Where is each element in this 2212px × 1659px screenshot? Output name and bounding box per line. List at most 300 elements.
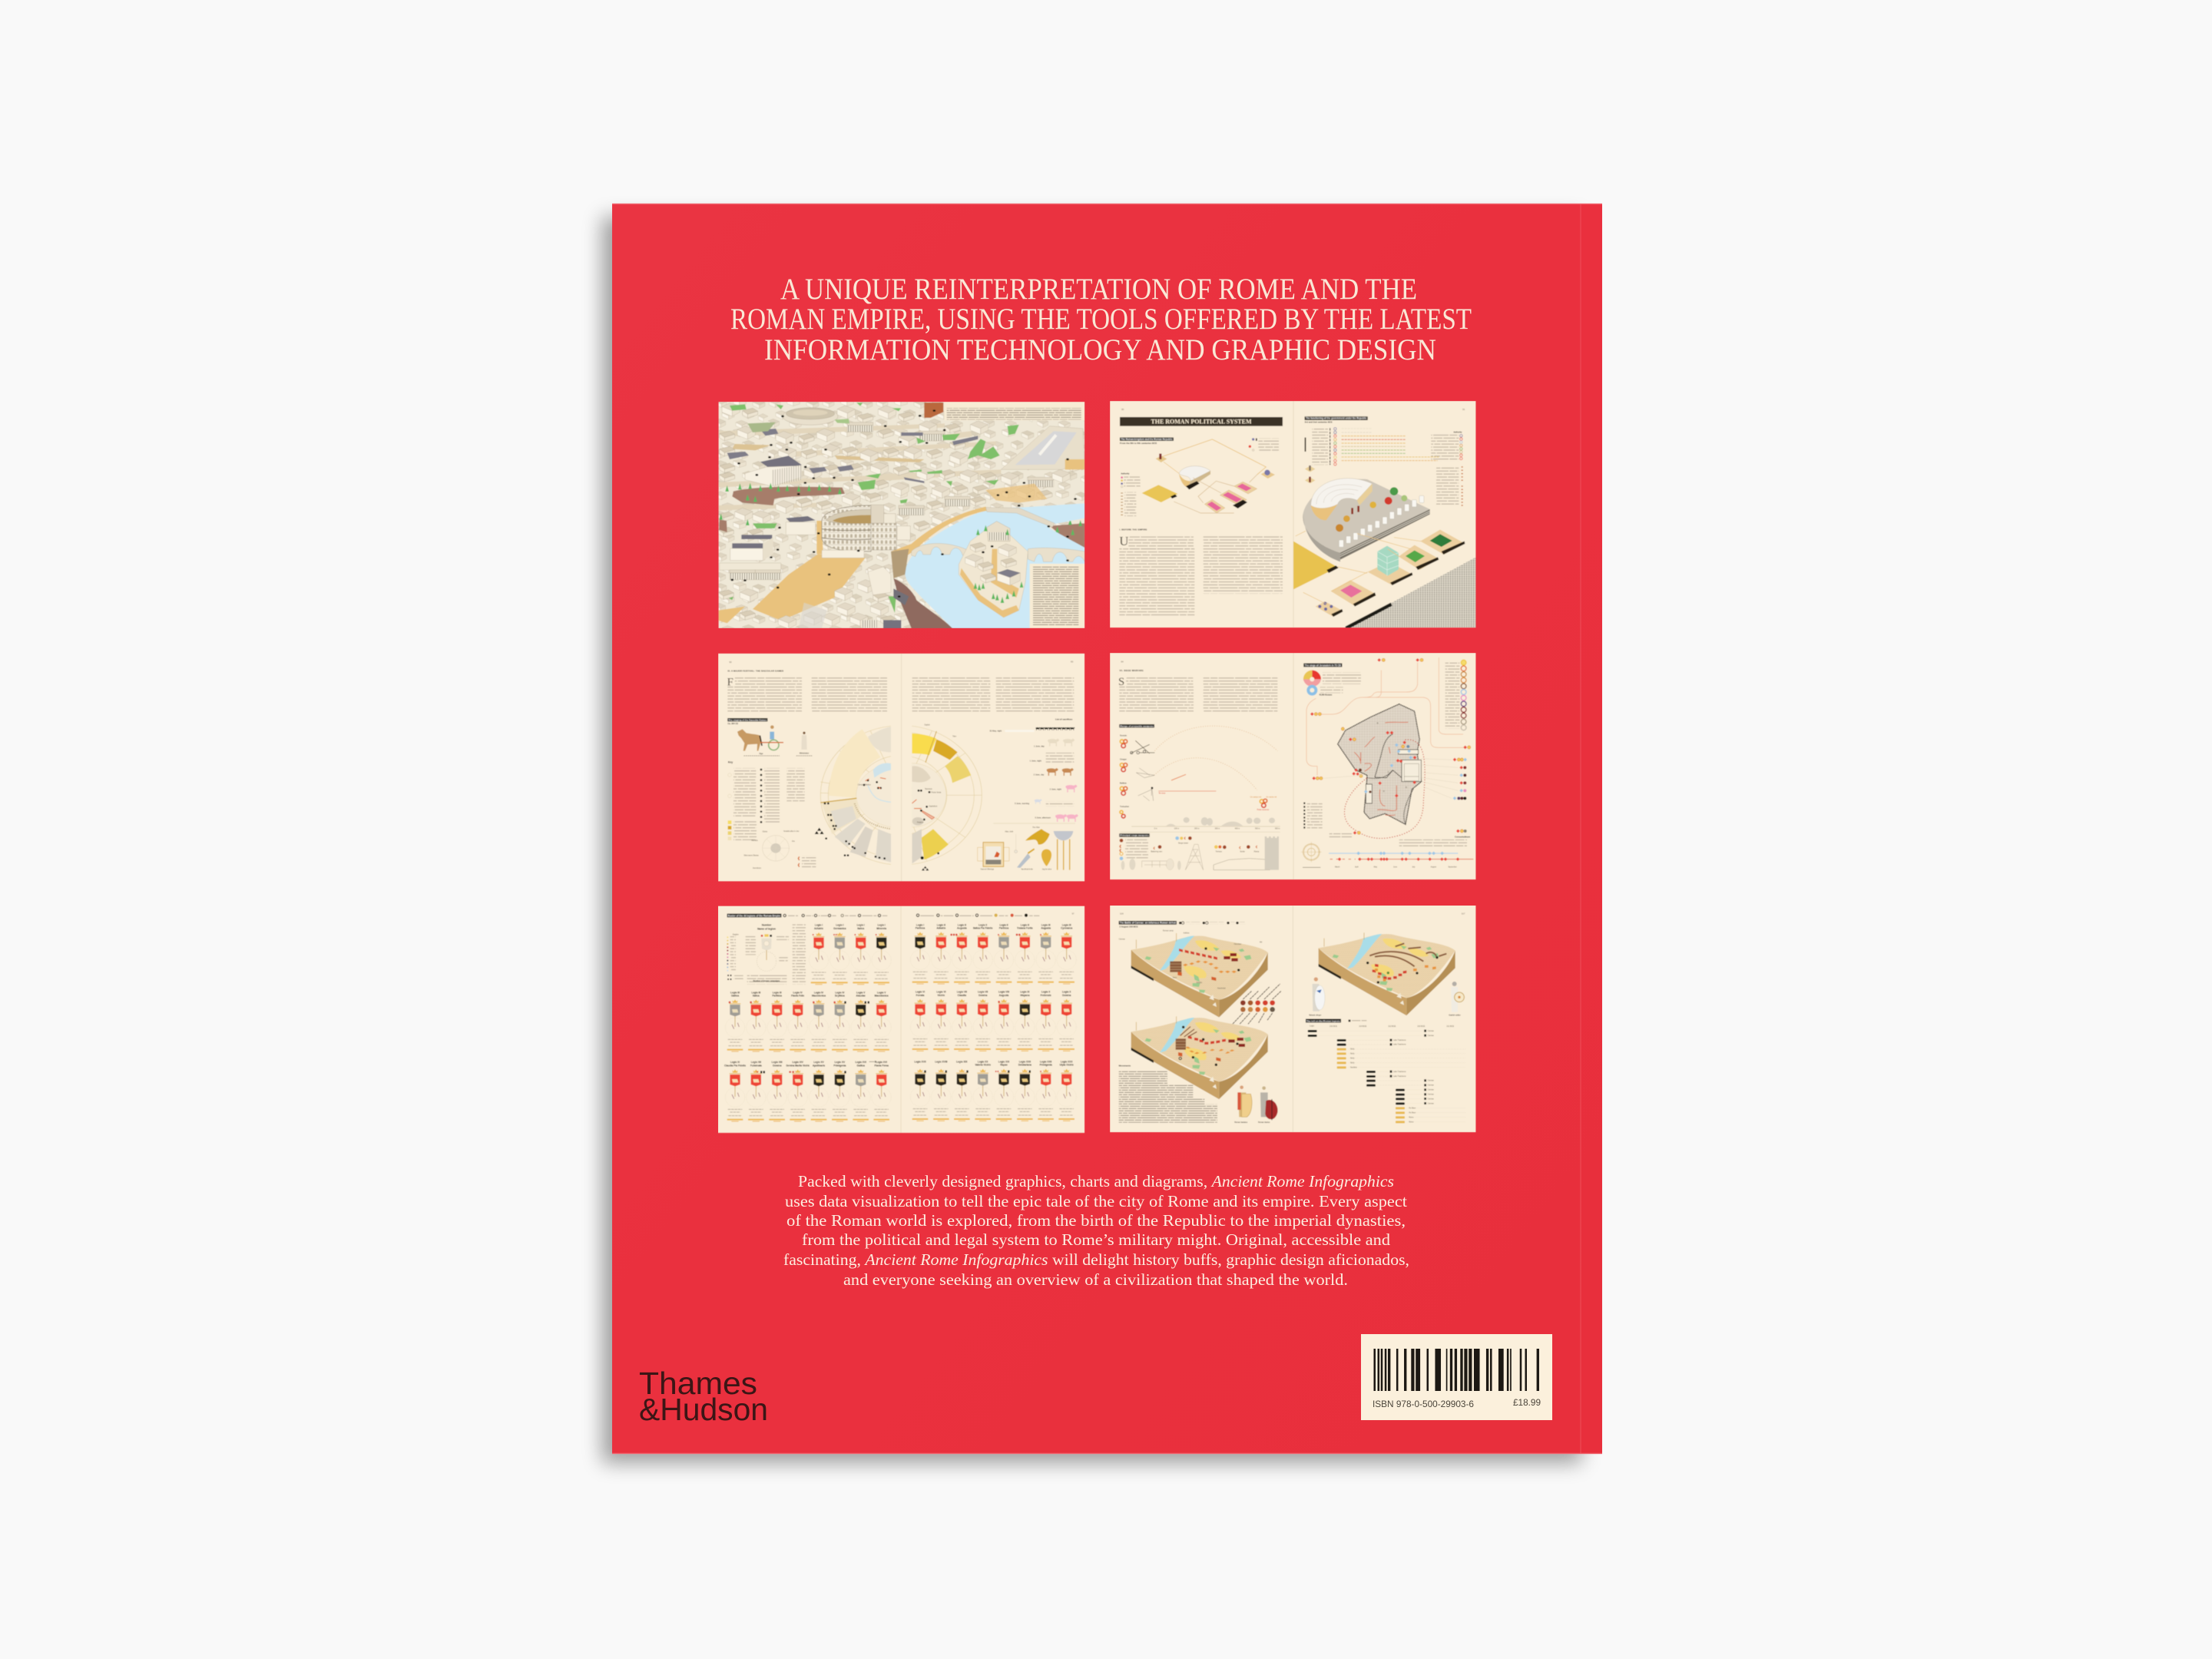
legion names: Legio XIX [956,1060,968,1063]
chart: projectile ranges: Un campo mir [1250,796,1261,799]
chart: legion tribunes timeline: Cannae [1428,1098,1435,1100]
legion names: Ferrata [916,994,925,997]
section heading: III. A MAJOR FESTIVAL: THE SAECULAR GAMES [727,669,783,672]
legion names: Legio III [773,991,782,994]
upper bridge [985,508,1055,527]
terrain block 1: Aufidus [1184,932,1190,935]
subheading: kingdom and republic: The Roman kingdom and the Roman Republic [1121,438,1173,441]
legend: authority right [1431,431,1463,506]
comitia squares [1296,530,1465,617]
terrain block 1: Hill [1260,942,1263,944]
illustration: Roman forum platform [1303,478,1430,561]
legion names: Legio XXX [1061,1060,1073,1063]
list of sacrifices: 2 June, night [1050,787,1061,790]
legion names: Scythica [835,995,845,998]
title bar [1120,417,1283,426]
barcode label: £18.99 [1513,1397,1541,1408]
panel: axonometric map of Rome spread [718,402,1084,629]
chart: projectile ranges: 600 m [1275,828,1280,830]
chart: projectile ranges: 300 m [1215,828,1220,830]
compass rose [1301,842,1322,867]
legend: authority right: Authority [1453,431,1462,433]
chart: legion tribunes timeline: Cannae [1428,1094,1435,1096]
timeline of the siege: March [1335,866,1340,868]
header legend [783,914,1039,917]
body text column 1: U [1119,534,1128,548]
subheading: government under the Republic: 3rd and 2nd centuries BCE [1305,420,1333,423]
arrow between legions [869,1061,876,1063]
ritual objects [978,826,1073,871]
legion names: Rapax [1000,1064,1008,1067]
brown slope with trees [719,483,1084,548]
chart: projectile ranges: 0 m [1154,828,1157,830]
timeline of the siege: September [1448,866,1457,868]
legion names: Primigenia [833,1065,846,1068]
legion names: Italica [753,995,760,998]
legion names: Legio XVIII [935,1060,948,1063]
buildings [718,403,1083,538]
body copy: fascinating, Ancient Rome Infographics will delight history buffs, graphic design aficionados, [783,1250,1409,1269]
attack groups around the map [1310,658,1471,835]
hatched tree wedge [868,727,891,752]
list of sacrifices: 3 June, afternoon [1035,816,1051,819]
headline [730,273,1472,366]
chart: legion tribunes timeline: Rome [1409,1117,1414,1118]
legend: authority and people [1121,472,1141,516]
legion names: Minervia [876,927,886,930]
illustration: siege towers and ramps: Sortie [1240,850,1245,853]
legion names: Legio VI [936,991,946,994]
legion names: Legio VIII [998,991,1009,994]
aftermath note [1330,833,1471,848]
legion standards: row 1 [809,932,1076,985]
legion names: Valeria Victrix [975,1064,991,1067]
page numbers [1121,408,1465,411]
chart: projectile ranges: 200 m [1194,828,1200,830]
legend: siege weapons icons [1445,660,1466,730]
chart: projectile ranges: Onager [1120,758,1127,761]
title bar: THE ROMAN POLITICAL SYSTEM [1151,419,1252,426]
timeline of the siege: July [1412,866,1416,868]
body copy: and everyone seeking an overview of a civilization that shaped the world. [843,1270,1348,1289]
greenery patches [726,402,1019,613]
chart: legion tribunes timeline: Cannae [1428,1090,1435,1091]
subheading: government under the Republic: The functioning of the government under the Republic [1306,417,1367,420]
inner city disc [878,763,946,827]
figures: Numidian and Gaulish warrior: Balearic slinger [1309,1014,1322,1016]
figures: Roman legionary and veteran: Roman hastatus [1234,1121,1248,1124]
legend: key [728,760,805,840]
chart: magistracies timeline [1305,428,1439,465]
small plan of Rome: Silva sacra Dianae [743,855,759,857]
legion names: Legio XVI [876,1061,887,1064]
legion names: Legio III [1041,923,1051,926]
timeline of the siege [1329,852,1473,868]
aftermath note: Consuetudinem [1455,835,1471,838]
coloured offering wedges [912,733,936,755]
chart: legion tribunes timeline: Cannae [1428,1031,1435,1032]
legion names: Cyrenaica [1061,927,1072,930]
headline: ROMAN EMPIRE, USING THE TOOLS OFFERED BY THE LATEST [730,303,1472,336]
chart: legion tribunes timeline: Sicily [1350,1058,1355,1059]
legion names: Ulpia Victrix [1060,1064,1074,1067]
chart: legion tribunes timeline: Rome [1409,1121,1414,1123]
location markers [730,409,1077,598]
theatre of Marcellus [822,505,910,558]
diagram: early Roman institutions [1142,439,1275,513]
chart: legion tribunes timeline: Sicily [1350,1062,1355,1064]
legion names: Gemina [1062,994,1071,997]
body text columns: S [1118,676,1124,688]
chart: projectile ranges: 500 m [1255,828,1260,830]
chart: legion tribunes timeline: Lake Trasimene [1393,1071,1406,1073]
radial diagram left half: Campus Martius [858,784,871,786]
circus [1001,426,1084,469]
header title: Roster of the 44 legions of the Roman Empire [728,914,781,917]
legion names: Gallica [731,995,739,998]
legion names: Legio II [979,923,987,926]
legion names: Augusta [957,927,967,930]
terrain block 2 [1131,1016,1268,1099]
terrain block 1: Roman camp [1163,931,1174,932]
legion names: Legio III [751,991,760,994]
legion names: Adiutrix [814,927,823,930]
legion names: Legio IV [814,991,824,994]
legion names: Parthica [772,995,782,998]
legion names: Legio VI [916,991,925,994]
streets and terraces [718,423,1001,511]
bridge right [1028,548,1084,561]
legion names: Italica [857,927,864,930]
legion names: Legio II [937,923,945,926]
subheading: kingdom and republic [1120,438,1174,445]
radial diagram right half: Capitol [924,724,930,727]
legion names: Macedonica [875,995,889,998]
small plan of Rome [743,830,816,869]
legion names: Legio XV [835,1061,846,1064]
legion names: Victrix [938,994,945,997]
legion names: Legio XVI [855,1061,866,1064]
legion names: Flavia Felix [791,995,804,998]
legion names: Legio III [1062,923,1071,926]
page numbers [729,661,1074,664]
panel: Battle of Cannae spread [1110,905,1476,1132]
legion names: Claudia [958,994,966,997]
legion names: Parthica [999,927,1008,930]
panel: Siege Warfare spread [1110,653,1476,879]
body copy: Packed with cleverly designed graphics, charts and diagrams, Ancient Rome Infographics [798,1172,1394,1190]
legion names: Gemina Martia Victrix [786,1065,810,1068]
subheading: staging of the games [727,718,767,725]
legion names: Legio VII [978,991,988,994]
body copy: uses data visualization to tell the epic tale of the city of Rome and its empire. Every aspect [785,1192,1407,1210]
subheading: projectile weapons: Range of projectile weapons [1120,724,1154,727]
map of Jerusalem: F [1406,803,1408,806]
radial diagram left half [815,726,982,865]
yellow comitia triangle [1293,541,1339,589]
legion names: Gemina [773,1065,782,1068]
body text column 2 [1204,535,1283,594]
chart: legion tribunes timeline: Lake Trasimene [1393,1044,1406,1046]
small senate tokens [1305,465,1315,483]
legion names: Legio XV [813,1061,825,1064]
small plan of Rome: Mundus [751,840,758,842]
key: how to read a legion: Name of legion [757,927,776,930]
pie charts [1303,671,1361,696]
radial diagram right half: Tarentum [925,788,932,790]
body copy: from the political and legal system to Rome’s military might. Original, accessible and [802,1230,1390,1249]
timeline of the siege: June [1393,866,1398,868]
legion names: Legio V [877,991,886,994]
radial diagram right half: Tiber [952,735,956,737]
foreground buildings [718,565,901,629]
river Tiber [905,503,1084,628]
body text columns [727,677,1074,712]
map of Jerusalem: D [1383,790,1386,793]
key: how to read a legion: Number of known campaigns [753,980,780,982]
legion names: Traiana Fortis [1017,927,1033,930]
attack markers on the map [1341,727,1416,797]
caption box bottom right [1030,564,1084,628]
brick patch [924,402,943,418]
caption box top right [944,402,1084,420]
legion names: Legio XX [978,1060,988,1063]
terrain block 1: Hasdrubal [1217,987,1226,989]
text: movements: Movements [1119,1064,1131,1067]
chart: legion tribunes timeline: Cannae [1428,1103,1435,1104]
small plan of Rome: Gloria [763,831,768,833]
legion names [724,923,1074,1068]
bridge left [912,544,966,557]
legion names: Legio I [916,923,924,926]
text: movements [1119,1064,1217,1123]
terrain block 1: Varro [1173,976,1177,979]
title: 2 August 216 BCE [1119,925,1138,928]
chart: legion tribunes timeline: Po River [1409,1107,1416,1109]
senate hemicycle [1311,478,1373,508]
timeline of the siege: May [1374,866,1378,868]
page shadow under the book [602,217,1581,1463]
legion names: Alaudae [856,995,866,998]
legion names: Legio X [1062,991,1071,994]
map of Jerusalem [1338,704,1425,839]
subheading: siege weapons: Principal siege weapons [1120,834,1149,837]
list of sacrifices: 31 May, night [989,730,1002,733]
icon: standing priest [796,732,812,756]
figures: Roman legionary and veteran [1234,1085,1278,1124]
ritual objects: Sacrificial knife [1021,869,1034,871]
panel: roster of the legions spread [717,906,1084,1133]
chart: legion tribunes timeline: 212 BCE [1388,1025,1396,1028]
icon: standing priest: Ministrator [800,751,809,754]
barcode label [1361,1334,1552,1420]
legion names: Legio XI [730,1061,740,1064]
illustration: siege towers and ramps: Ramp [1254,850,1260,853]
legion names: Legio II [1021,923,1029,926]
icon: horse and chariot [737,725,783,756]
legion names: Flavia Firma [874,1065,889,1068]
legion names: Legio XIII [772,1061,783,1064]
terrain block 1: Cavalry [1196,982,1203,984]
page number: 94 [1121,661,1124,664]
chart: legion tribunes timeline: Sicily [1350,1049,1355,1051]
small plan of Rome: Vestalis alba in vivo [783,830,800,833]
illustration: siege towers and ramps: Siege tower [1178,842,1188,844]
legion names: Legio I [857,924,865,927]
section heading: I. BEFORE THE EMPIRE [1119,528,1147,531]
legion names: Legio II [958,923,966,926]
legion names: Legio II [999,923,1008,926]
pale wedge [829,729,881,798]
legion names: Adiutrix [936,927,946,930]
legion names: Legio III [730,991,740,994]
legion names: Legio I [815,924,823,927]
icon: horse and chariot: Ilige [760,752,763,755]
illustration: siege towers and ramps: Battering ram [1151,850,1162,853]
battle honours [729,934,1041,1073]
barcode label: ISBN 978-0-500-29903-6 [1373,1399,1474,1409]
chart: legion tribunes timeline: Cannae [1428,1035,1435,1037]
publisher logo: &Hudson [639,1392,768,1427]
legion names: Legio IV [793,991,803,994]
chart: legion tribunes timeline: Cannae [1428,1081,1435,1082]
subheading: toll on the legions [1306,1019,1366,1022]
legion names: Hispana [1020,994,1030,997]
legion names: Macedonica [812,995,826,998]
panel: roster of the legions spread: 97 [1072,912,1075,916]
page numbers: 116 [1120,912,1124,916]
map of Jerusalem: E [1406,786,1407,789]
page numbers: 117 [1462,912,1465,915]
legend: gates [1303,802,1323,829]
legend circles: units [1229,984,1281,1028]
headline: A UNIQUE REINTERPRETATION OF ROME AND THE [780,273,1417,306]
body text column 1 [1119,534,1194,616]
internal red routes [1354,722,1408,816]
page numbers [1120,912,1465,916]
legion names: Legio I [878,924,886,927]
illustration: siege towers and ramps [1120,836,1279,870]
figures: Roman legionary and veteran: Roman triarius [1258,1121,1270,1124]
title [1119,921,1177,928]
figures: Numidian and Gaulish warrior [1309,977,1464,1016]
key: colour scale: Eagles [733,934,739,936]
chart: legion tribunes timeline: Lake Trasimene [1393,1039,1406,1041]
legend: authority and people: Authority [1121,472,1130,475]
colonnade [1339,495,1424,547]
key: colour scale [727,924,806,985]
top arena [783,408,838,425]
chart: projectile ranges: Tiro teso [1158,792,1166,794]
radial diagram right half [820,724,982,870]
legion standards: row 3 [725,1069,1076,1121]
small key top right [1249,438,1279,451]
subheading: government under the Republic [1305,416,1368,423]
legion names: Apollinaris [813,1065,825,1068]
legion names: Primigenia [1040,1064,1052,1067]
chart: legion tribunes timeline: Legio [1310,1025,1315,1027]
chart: projectile ranges: Scorpio [1120,734,1128,737]
chart: legion tribunes timeline: Lake Trasimene [1393,1075,1406,1078]
body copy: of the Roman world is explored, from the birth of the Republic to the imperial dynasties, [786,1211,1406,1230]
markers [918,790,939,870]
outer siege wall [1344,740,1425,839]
list of sacrifices: 1 June, day [1034,745,1045,748]
grey-roofed temples [720,429,978,580]
chart: projectile ranges: Trebuchet [1120,805,1129,808]
legion names: Legio IV [835,991,845,994]
chart: projectile ranges: Un monte mir [1266,796,1277,799]
terrain block 1: Hannibal [1234,944,1241,945]
chart: projectile ranges: Ballista [1120,781,1127,784]
legion names: Gallica [856,1065,865,1068]
radial diagram right half: Capitolium [929,806,937,808]
barcode bars [1373,1349,1539,1391]
page numbers: 30 [1121,408,1124,411]
legend: key: Key [728,760,733,763]
page numbers: 93 [1071,661,1074,664]
legion names: Legio X [1041,991,1051,994]
body copy [783,1172,1409,1289]
list of sacrifices: 2 June, day [1034,773,1045,777]
legion names: Legio XXII [1019,1060,1031,1063]
key: how to read a legion: Number [762,924,772,927]
list of sacrifices: 3 June, morning [1015,802,1030,805]
Tiber island [959,522,1028,618]
radial diagram right half: Palatine [917,822,924,824]
publisher logo: Thames [639,1366,757,1401]
chart: projectile ranges: Porta murorum [1257,809,1269,811]
legion names: Legio I [836,924,844,927]
pie charts: 76,000 Romans [1319,694,1333,696]
legion names: Legio VII [957,991,967,994]
subheading: staging of the games: The staging of the Saecular Games [728,718,767,721]
legion names: Legio XXI [998,1060,1009,1063]
title: The Battle of Cannae: an infamous Roman defeat [1120,922,1177,925]
ritual objects: Jug for wine [1042,869,1052,871]
ritual objects: Altar, cloth [1005,830,1014,833]
crowd of citizens [1346,557,1476,628]
chart: projectile ranges: 100 m [1174,828,1179,830]
list of sacrifices: 1 June, night [1030,759,1041,762]
legion names: Legio XVII [914,1060,926,1063]
radial diagram right half: Ponte Vesta [932,791,942,793]
legion names: Claudia Pia Fidelis [724,1065,746,1068]
ritual objects: Sacred Offerings [981,869,995,871]
terrain block 1: Cannae [1119,939,1126,941]
legion names: Fretensis [1041,994,1051,997]
terrain block 1 [1119,931,1268,1017]
ritual objects: Fire Altar [1032,826,1040,829]
chart: legion tribunes timeline: Po River [1409,1111,1416,1114]
chart: legion tribunes timeline: 211 BCE [1446,1025,1454,1028]
subheading: staging of the games: Ca. 204 CE [727,722,738,725]
illustration: siege towers and ramps: Terrace [1216,850,1223,853]
panel: The Roman Political System spread [1110,401,1476,628]
chart: projectile ranges: 400 m [1235,828,1240,830]
chart: legion tribunes timeline: 210 BCE [1417,1025,1426,1028]
chart: legion tribunes timeline: 214 BCE [1359,1025,1367,1028]
legion names: Augusta [1041,927,1051,930]
inner city disc [856,763,946,828]
panel: Saecular Games spread [718,654,1084,882]
legion names: Legio XII [751,1061,761,1064]
figures: Numidian and Gaulish warrior: Gaulish soldier [1449,1014,1461,1016]
chart: legion tribunes timeline: Cannae [1428,1085,1435,1087]
legion names: Legio XIV [792,1061,804,1064]
body text columns: F [727,677,733,689]
legion names: Legio V [856,991,866,994]
